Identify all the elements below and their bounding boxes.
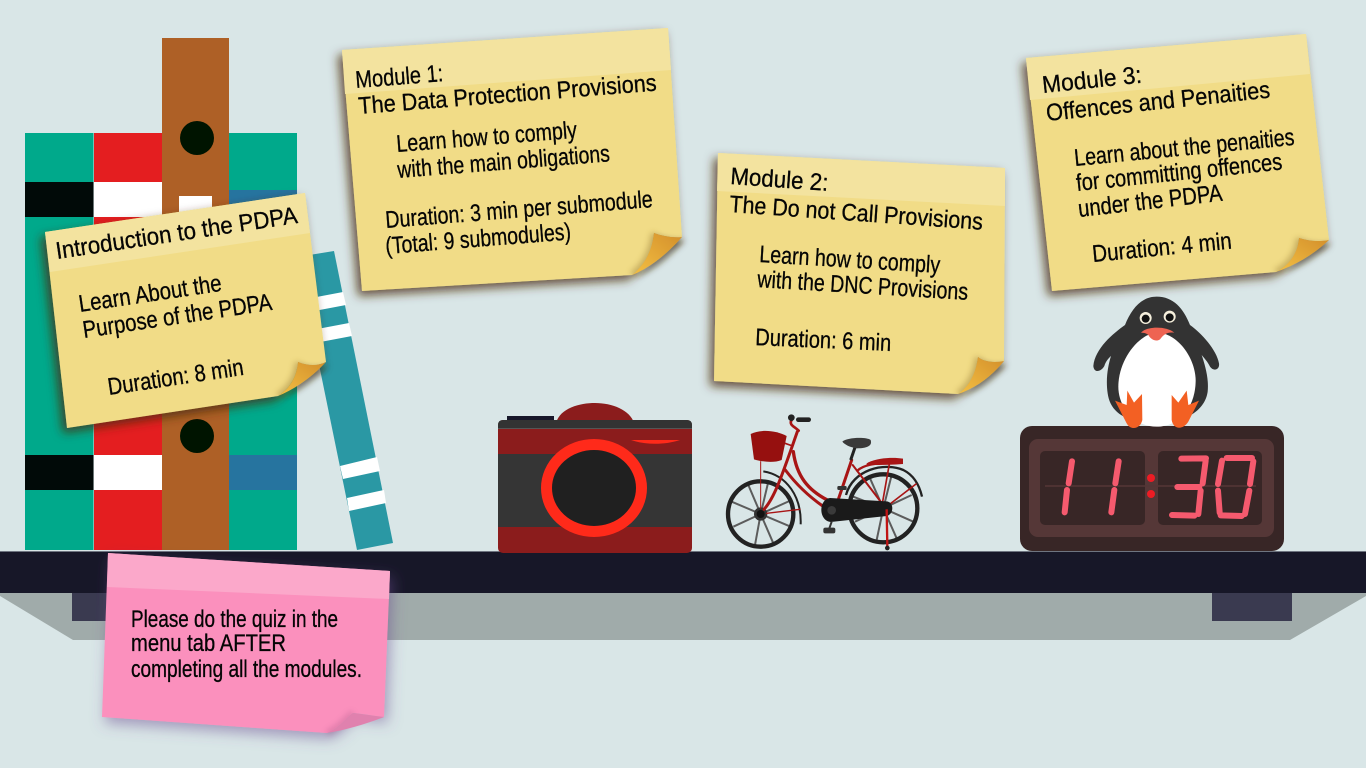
chain guard xyxy=(821,498,892,522)
rear wheel xyxy=(846,467,922,542)
note title: Module 1: xyxy=(354,60,444,94)
note body: with the DNC Provisions xyxy=(756,266,969,306)
note header band xyxy=(342,28,671,94)
note body: (Total: 9 submodules) xyxy=(384,218,572,260)
flash highlight xyxy=(631,440,680,444)
note title: Offences and Penaities xyxy=(1045,77,1271,127)
note body: menu tab AFTER xyxy=(131,630,286,657)
front wheel xyxy=(728,471,801,547)
note: introduction xyxy=(45,193,326,428)
camera body xyxy=(498,420,692,553)
note body: Learn how to comply xyxy=(759,241,941,279)
body and wings xyxy=(1093,297,1219,425)
kickstand xyxy=(885,509,890,550)
note body xyxy=(1073,124,1296,268)
note: module 1 xyxy=(342,28,682,291)
note body: with the main obligations xyxy=(396,140,611,184)
curl shade xyxy=(327,713,353,733)
hours panel xyxy=(1040,451,1145,525)
clock face xyxy=(1029,439,1274,537)
curl shade xyxy=(1276,238,1299,272)
note: quiz reminder xyxy=(102,553,390,733)
digital clock xyxy=(1020,426,1284,551)
note title xyxy=(729,163,984,236)
handlebar xyxy=(788,414,811,422)
penguin xyxy=(1093,297,1219,428)
books xyxy=(25,38,393,550)
note body: Learn how to comply xyxy=(395,117,578,158)
viewfinder xyxy=(507,416,554,422)
curl shade xyxy=(958,357,978,394)
note body: Learn About the xyxy=(77,270,223,318)
note body: Duration: 6 min xyxy=(755,324,892,357)
brown binder xyxy=(162,38,229,550)
green book left xyxy=(25,133,94,550)
note header band xyxy=(1026,34,1310,100)
leaning book xyxy=(297,251,393,550)
red book xyxy=(94,133,162,550)
clock case xyxy=(1020,426,1284,551)
note: module 2 xyxy=(714,153,1005,394)
note paper xyxy=(714,153,1005,394)
note body xyxy=(755,241,969,357)
note header band xyxy=(717,153,1005,206)
note body: Please do the quiz in the xyxy=(131,606,338,633)
note body: Duration: 4 min xyxy=(1091,228,1233,268)
note header band xyxy=(107,553,390,599)
belly xyxy=(1118,333,1196,427)
minutes panel xyxy=(1158,451,1262,525)
note title: The Data Protection Provisions xyxy=(357,70,658,120)
note curl xyxy=(958,357,1004,394)
note body: completing all the modules. xyxy=(131,656,362,683)
right bracket xyxy=(1212,593,1292,621)
beak xyxy=(1141,328,1174,341)
note title: Introduction to the PDPA xyxy=(54,202,299,265)
left bracket xyxy=(72,593,152,621)
note body: Purpose of the PDPA xyxy=(81,289,274,344)
frame xyxy=(761,420,916,513)
curl shade xyxy=(632,233,654,275)
feet xyxy=(1115,391,1199,428)
note curl xyxy=(278,362,326,396)
note body xyxy=(131,606,362,683)
top dial xyxy=(556,403,634,423)
rear rack xyxy=(867,458,903,465)
note body: Duration: 8 min xyxy=(106,354,245,401)
note paper xyxy=(102,553,390,733)
shelf board xyxy=(0,551,1366,593)
note body: for committing offences xyxy=(1075,148,1283,197)
green book right xyxy=(229,133,297,550)
note curl xyxy=(1276,238,1329,272)
pedals xyxy=(823,486,847,533)
shelf underside xyxy=(0,593,1366,640)
note title: The Do not Call Provisions xyxy=(729,191,984,236)
note title: Module 3: xyxy=(1041,62,1143,99)
note paper xyxy=(45,193,326,428)
camera xyxy=(498,403,692,553)
note header band xyxy=(45,193,310,272)
lens xyxy=(546,444,642,532)
saddle xyxy=(842,438,871,460)
curl shade xyxy=(278,362,298,396)
note body: Learn about the penaities xyxy=(1073,124,1296,172)
note body xyxy=(384,117,654,260)
note title: Module 2: xyxy=(730,163,829,197)
digits 11:30 xyxy=(1065,458,1253,516)
note body: under the PDPA xyxy=(1077,180,1224,223)
shelf xyxy=(0,551,1366,640)
note body xyxy=(77,270,274,401)
note paper xyxy=(1026,34,1329,291)
note body: Duration: 3 min per submodule xyxy=(384,186,654,234)
note paper xyxy=(342,28,682,291)
eyes xyxy=(1140,311,1176,324)
colon xyxy=(1147,474,1155,498)
note: module 3 xyxy=(1026,34,1329,291)
note curl xyxy=(632,233,682,275)
bicycle xyxy=(728,414,922,550)
basket xyxy=(751,431,787,462)
note curl xyxy=(327,713,384,733)
